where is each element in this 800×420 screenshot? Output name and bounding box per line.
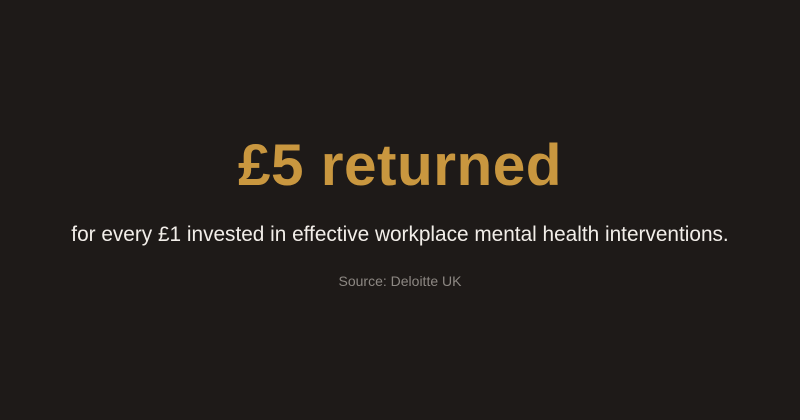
subtitle text: for every £1 invested in effective workplace mental health interventions. xyxy=(71,223,729,246)
source note: Source: Deloitte UK xyxy=(339,273,461,289)
title: £5 returned xyxy=(238,133,562,198)
